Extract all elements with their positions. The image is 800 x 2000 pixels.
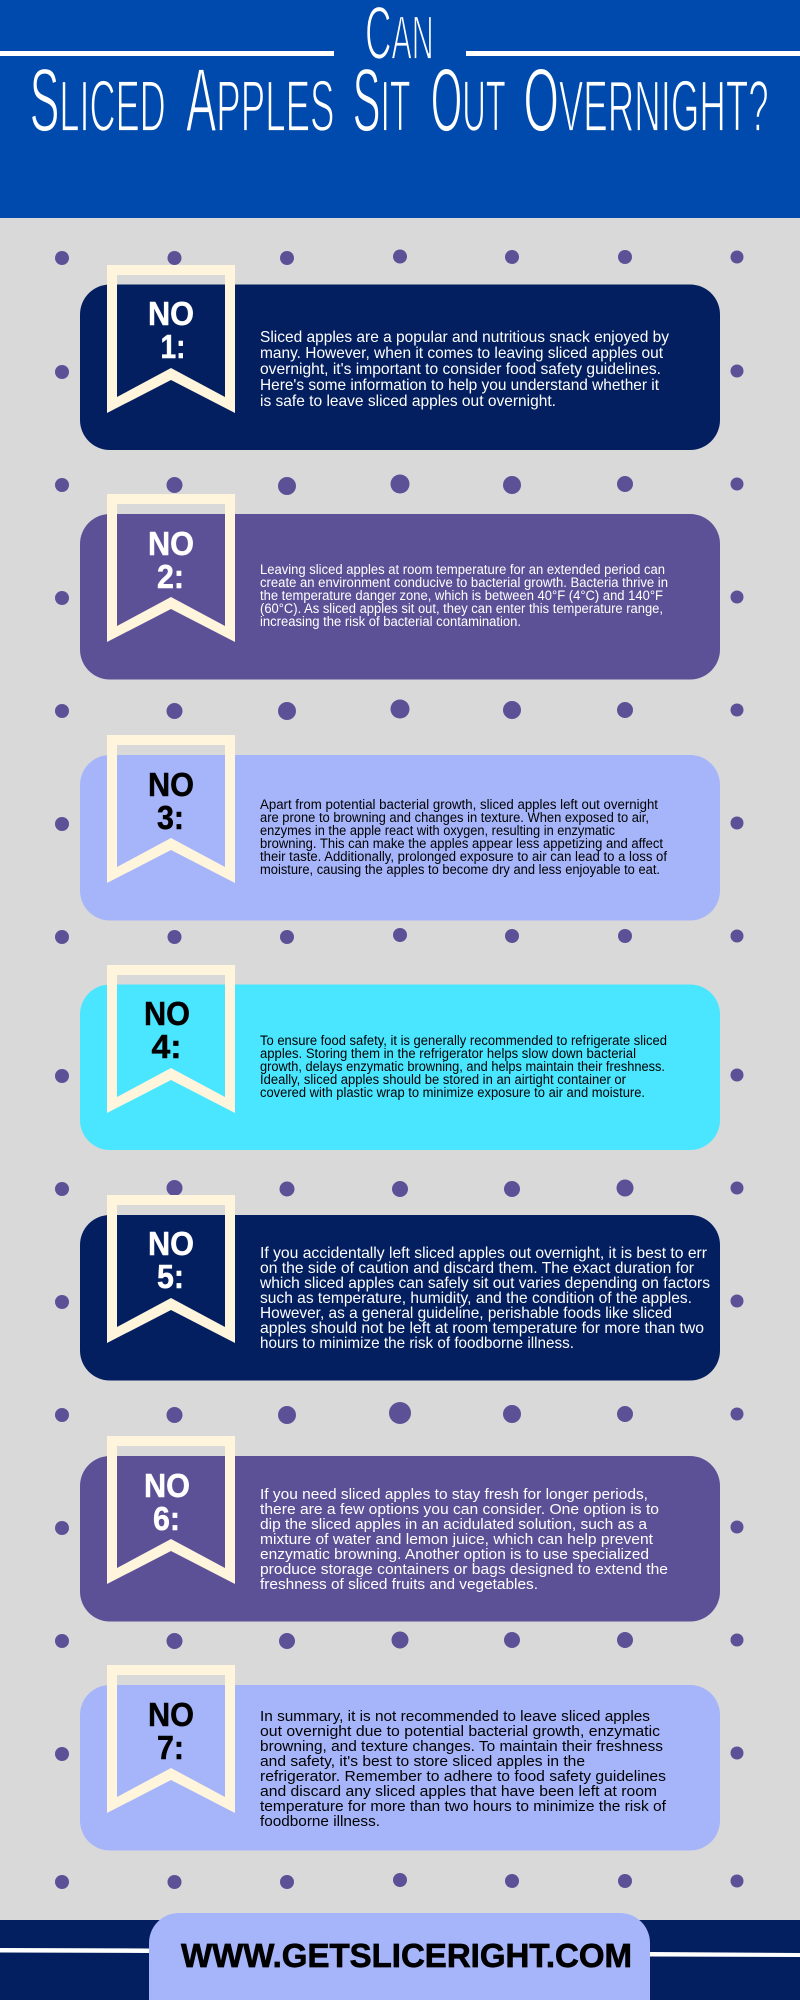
label: NO 4: NO	[144, 995, 190, 1032]
text: step 6 body: freshness of sliced fruits and vegetables.	[260, 1576, 538, 1593]
text: step 1 body: many. However, when it comes to leaving sliced apples out	[260, 345, 664, 362]
text: step 1 body: Here's some information to help you understand whether it	[260, 377, 660, 394]
text: step 2 body: increasing the risk of bacterial contamination.	[260, 614, 521, 629]
text: step 7 body: and discard any sliced apples that have been left at room	[260, 1783, 657, 1800]
text: step 6 body: If you need sliced apples to stay fresh for longer periods,	[260, 1486, 648, 1503]
label: NO 3	[148, 766, 194, 836]
footer band	[0, 1913, 800, 2000]
text: step 5 body: on the side of caution and discard them. The exact duration for	[260, 1260, 695, 1277]
label: NO 6: NO	[144, 1467, 190, 1504]
icon: ribbon 1	[107, 265, 235, 413]
text: step 5 body: which sliced apples can safely sit out varies depending on factors	[259, 1275, 710, 1292]
label: NO 1: NO	[148, 295, 194, 332]
text: step 7 body: refrigerator. Remember to adhere to food safety guidelines	[260, 1768, 666, 1785]
icon: ribbon 4	[107, 965, 235, 1113]
text: step 5 body	[259, 1245, 710, 1352]
label: NO 5	[148, 1225, 194, 1295]
label: NO 6	[144, 1467, 190, 1537]
title: OUT	[431, 50, 506, 150]
title: SIT	[353, 49, 411, 150]
title	[30, 0, 769, 151]
label: NO 5: NO	[148, 1225, 194, 1262]
text: step 6 body	[260, 1486, 668, 1593]
text: step 4 body: To ensure food safety, it is generally recommended to refrigerate sliced	[260, 1033, 667, 1048]
icon: ribbon 3	[107, 735, 235, 883]
website url: WWW.GETSLICERIGHT.COM	[181, 1937, 632, 1974]
text: step 6 body: produce storage containers or bags designed to extend the	[260, 1561, 668, 1578]
text: step 6 body: there are a few options you can consider. One option is to	[260, 1501, 659, 1518]
title: APPLES	[186, 50, 334, 151]
text: step 7 body: temperature for more than two hours to minimize the risk of	[260, 1798, 667, 1815]
text: step 3 body: are prone to browning and changes in texture. When exposed to air,	[260, 810, 649, 825]
icon: ribbon 7	[107, 1665, 235, 1813]
header banner	[0, 0, 800, 218]
text: step 1 body: is safe to leave sliced apples out overnight.	[260, 393, 556, 410]
panel: step 3	[80, 735, 720, 920]
panel: step 7	[80, 1665, 720, 1850]
text: step 2 body: Leaving sliced apples at room temperature for an extended period can	[260, 562, 665, 577]
label: NO 4: 4:	[152, 1028, 182, 1065]
icon: ribbon 2	[107, 494, 235, 642]
text: step 7 body	[260, 1708, 667, 1830]
text: step 7 body: foodborne illness.	[260, 1813, 380, 1830]
label: NO 7	[148, 1696, 194, 1766]
text: step 4 body: apples. Storing them in the refrigerator helps slow down bacterial	[260, 1046, 636, 1061]
text: step 4 body: covered with plastic wrap to minimize exposure to air and moisture.	[260, 1085, 645, 1100]
panel: step 2	[80, 494, 720, 680]
text: step 3 body: browning. This can make the apples appear less appetizing and affect	[260, 836, 663, 851]
text: step 6 body: mixture of water and lemon juice, which can help prevent	[260, 1531, 654, 1548]
text: step 4 body: growth, delays enzymatic browning, and helps maintain their freshness.	[260, 1059, 665, 1074]
label: NO 7: 7:	[157, 1729, 184, 1766]
panel: step 6	[80, 1436, 720, 1622]
text: step 3 body: their taste. Additionally, prolonged exposure to air can lead to a loss of	[260, 849, 667, 864]
label: NO 2: NO	[148, 525, 194, 562]
title: SLICED	[30, 51, 166, 151]
text: step 6 body: enzymatic browning. Another option is to use specialized	[260, 1546, 649, 1563]
text: step 3 body: enzymes in the apple react with oxygen, resulting in enzymatic	[260, 823, 615, 838]
text: step 7 body: browning, and texture changes. To maintain their freshness	[260, 1738, 663, 1755]
text: step 3 body: Apart from potential bacterial growth, sliced apples left out overnight	[260, 797, 658, 812]
text: step 5 body: such as temperature, humidity, and the condition of the apples.	[260, 1290, 692, 1307]
text: step 2 body	[260, 562, 668, 629]
text: step 5 body: hours to minimize the risk of foodborne illness.	[260, 1335, 574, 1352]
title: OVERNIGHT?	[524, 50, 769, 151]
label: NO 3: NO	[148, 766, 194, 803]
icon: ribbon 6	[107, 1436, 235, 1584]
text: step 1 body: Sliced apples are a popular and nutritious snack enjoyed by	[260, 329, 669, 346]
text: step 5 body: However, as a general guideline, perishable foods like sliced	[260, 1305, 672, 1322]
text: step 1 body: overnight, it's important to consider food safety guidelines.	[260, 361, 661, 378]
text: step 7 body: In summary, it is not recommended to leave sliced apples	[260, 1708, 650, 1725]
panel: step 4	[80, 965, 720, 1150]
label: NO 1	[148, 295, 194, 365]
text: step 3 body	[260, 797, 667, 877]
text: step 4 body: Ideally, sliced apples should be stored in an airtight container or	[260, 1072, 626, 1087]
label: NO 4	[144, 995, 190, 1065]
panel: step 1	[80, 265, 720, 450]
label: NO 1: 1:	[160, 328, 186, 365]
label: NO 5: 5:	[157, 1258, 184, 1295]
text: step 2 body: the temperature danger zone, which is between 40°F (4°C) and 140°F	[260, 588, 663, 603]
text: step 2 body: (60°C). As sliced apples sit out, they can enter this temperature range,	[260, 601, 663, 616]
text: step 5 body: If you accidentally left sliced apples out overnight, it is best to err	[260, 1245, 708, 1262]
text: step 2 body: create an environment conducive to bacterial growth. Bacteria thrive in	[260, 575, 668, 590]
text: step 3 body: moisture, causing the apples to become dry and less enjoyable to eat.	[260, 862, 660, 877]
text: step 7 body: and safety, it's best to store sliced apples in the	[260, 1753, 585, 1770]
label: NO 6: 6:	[153, 1500, 180, 1537]
dot grid background	[55, 250, 744, 1889]
label: NO 2	[148, 525, 194, 595]
label: NO 2: 2:	[157, 558, 184, 595]
text: step 4 body	[260, 1033, 667, 1100]
text: step 1 body	[260, 329, 669, 410]
icon: ribbon 5	[107, 1195, 235, 1343]
panel: step 5	[80, 1195, 720, 1380]
label: NO 7: NO	[148, 1696, 194, 1733]
text: step 7 body: out overnight due to potential bacterial growth, enzymatic	[260, 1723, 661, 1740]
text: step 6 body: dip the sliced apples in an acidulated solution, such as a	[260, 1516, 648, 1533]
label: NO 3: 3:	[157, 799, 184, 836]
text: step 5 body: apples should not be left at room temperature for more than two	[260, 1320, 704, 1337]
